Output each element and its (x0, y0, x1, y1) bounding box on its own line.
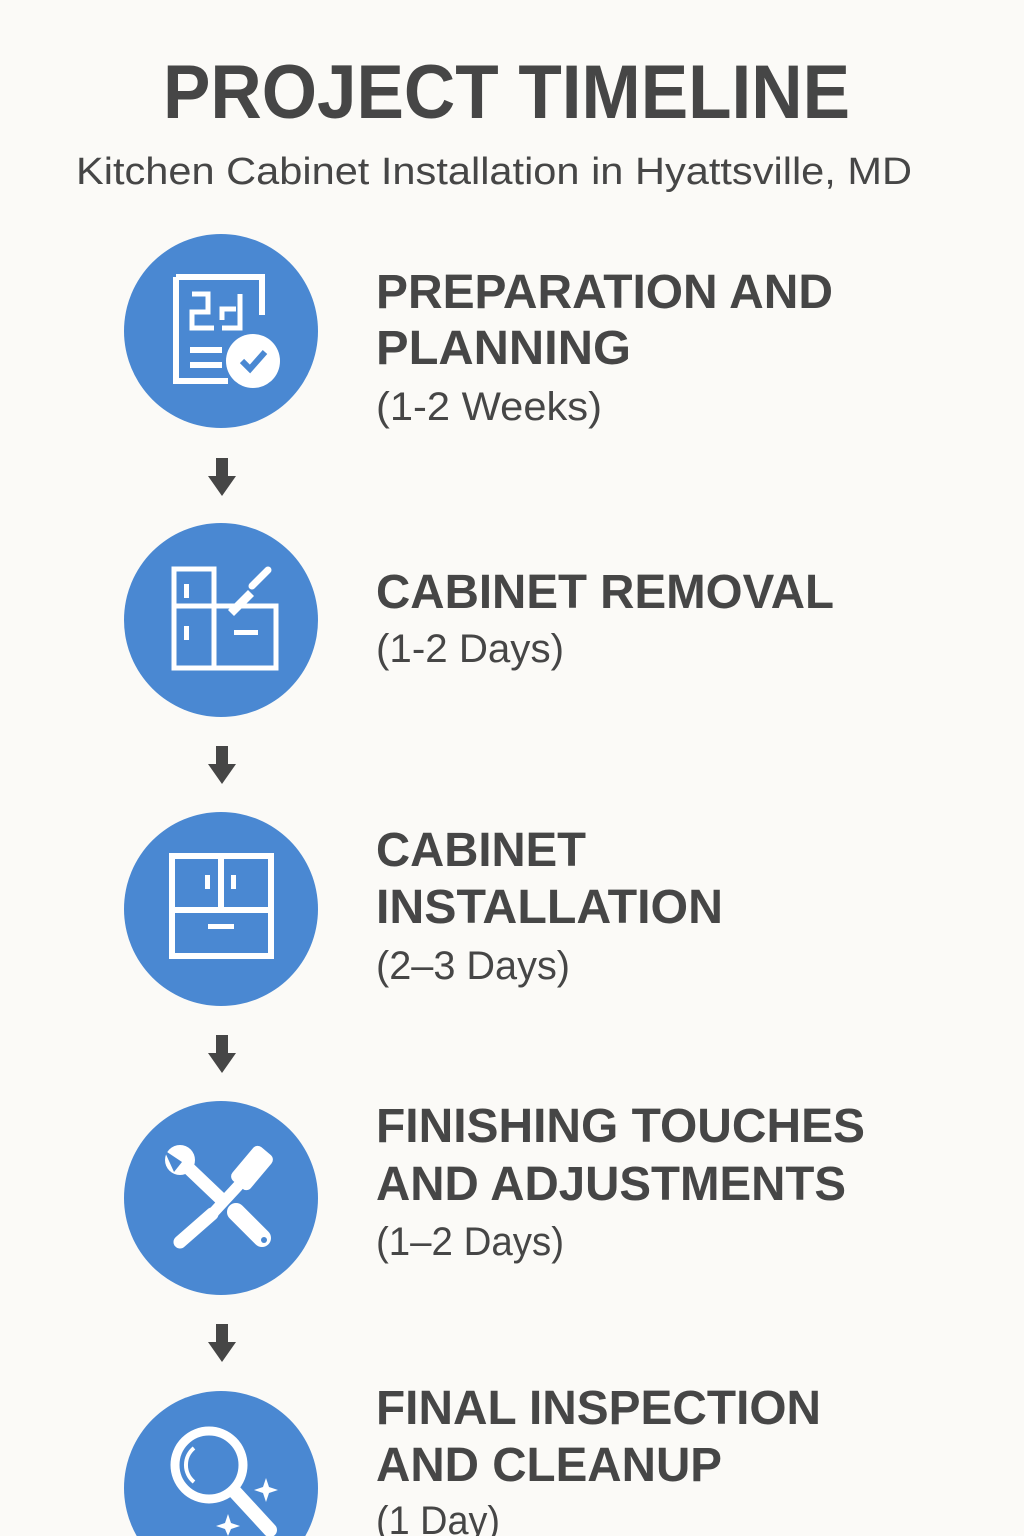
step 1: preparation and planning: PLANNING (376, 322, 631, 375)
arrow 4 (208, 1324, 236, 1362)
step 2: cabinet removal: (1-2 Days) (376, 627, 564, 671)
step 5: final inspection (124, 1382, 821, 1536)
step 3: cabinet installation (124, 812, 723, 1006)
heading: cabinet removal: CABINET REMOVAL (376, 566, 834, 619)
arrow 2 (208, 746, 236, 784)
step 3: cabinet installation: (2–3 Days) (376, 944, 570, 988)
step 1: preparation and planning: (1-2 Weeks) (376, 385, 602, 429)
step 2: cabinet removal (124, 523, 834, 717)
arrow 3 (208, 1035, 236, 1073)
step 5: final inspection: AND CLEANUP (376, 1439, 722, 1492)
icon: wrench and spatula (124, 1101, 318, 1295)
heading: cabinet installation: CABINET (376, 824, 586, 877)
step 4: finishing touches (124, 1100, 865, 1295)
heading: finishing touches and adjustments: FINISHING TOUCHES (376, 1100, 865, 1153)
arrow 1 (208, 458, 236, 496)
heading: final inspection and cleanup: FINAL INSPECTION (376, 1382, 821, 1435)
step 1: preparation and planning (124, 234, 833, 429)
title: PROJECT TIMELINE (163, 50, 850, 135)
subtitle: Kitchen Cabinet Installation in Hyattsville, MD (76, 151, 912, 193)
icon: magnifier with sparkles (124, 1391, 318, 1536)
step 4: finishing touches: (1–2 Days) (376, 1220, 564, 1264)
step 3: cabinet installation: INSTALLATION (376, 881, 723, 934)
step 4: finishing touches: AND ADJUSTMENTS (376, 1158, 846, 1211)
icon: plan document with check (124, 234, 318, 428)
icon: cabinet removal (124, 523, 318, 717)
icon: cabinet (124, 812, 318, 1006)
heading: preparation and planning: PREPARATION AND (376, 266, 833, 319)
